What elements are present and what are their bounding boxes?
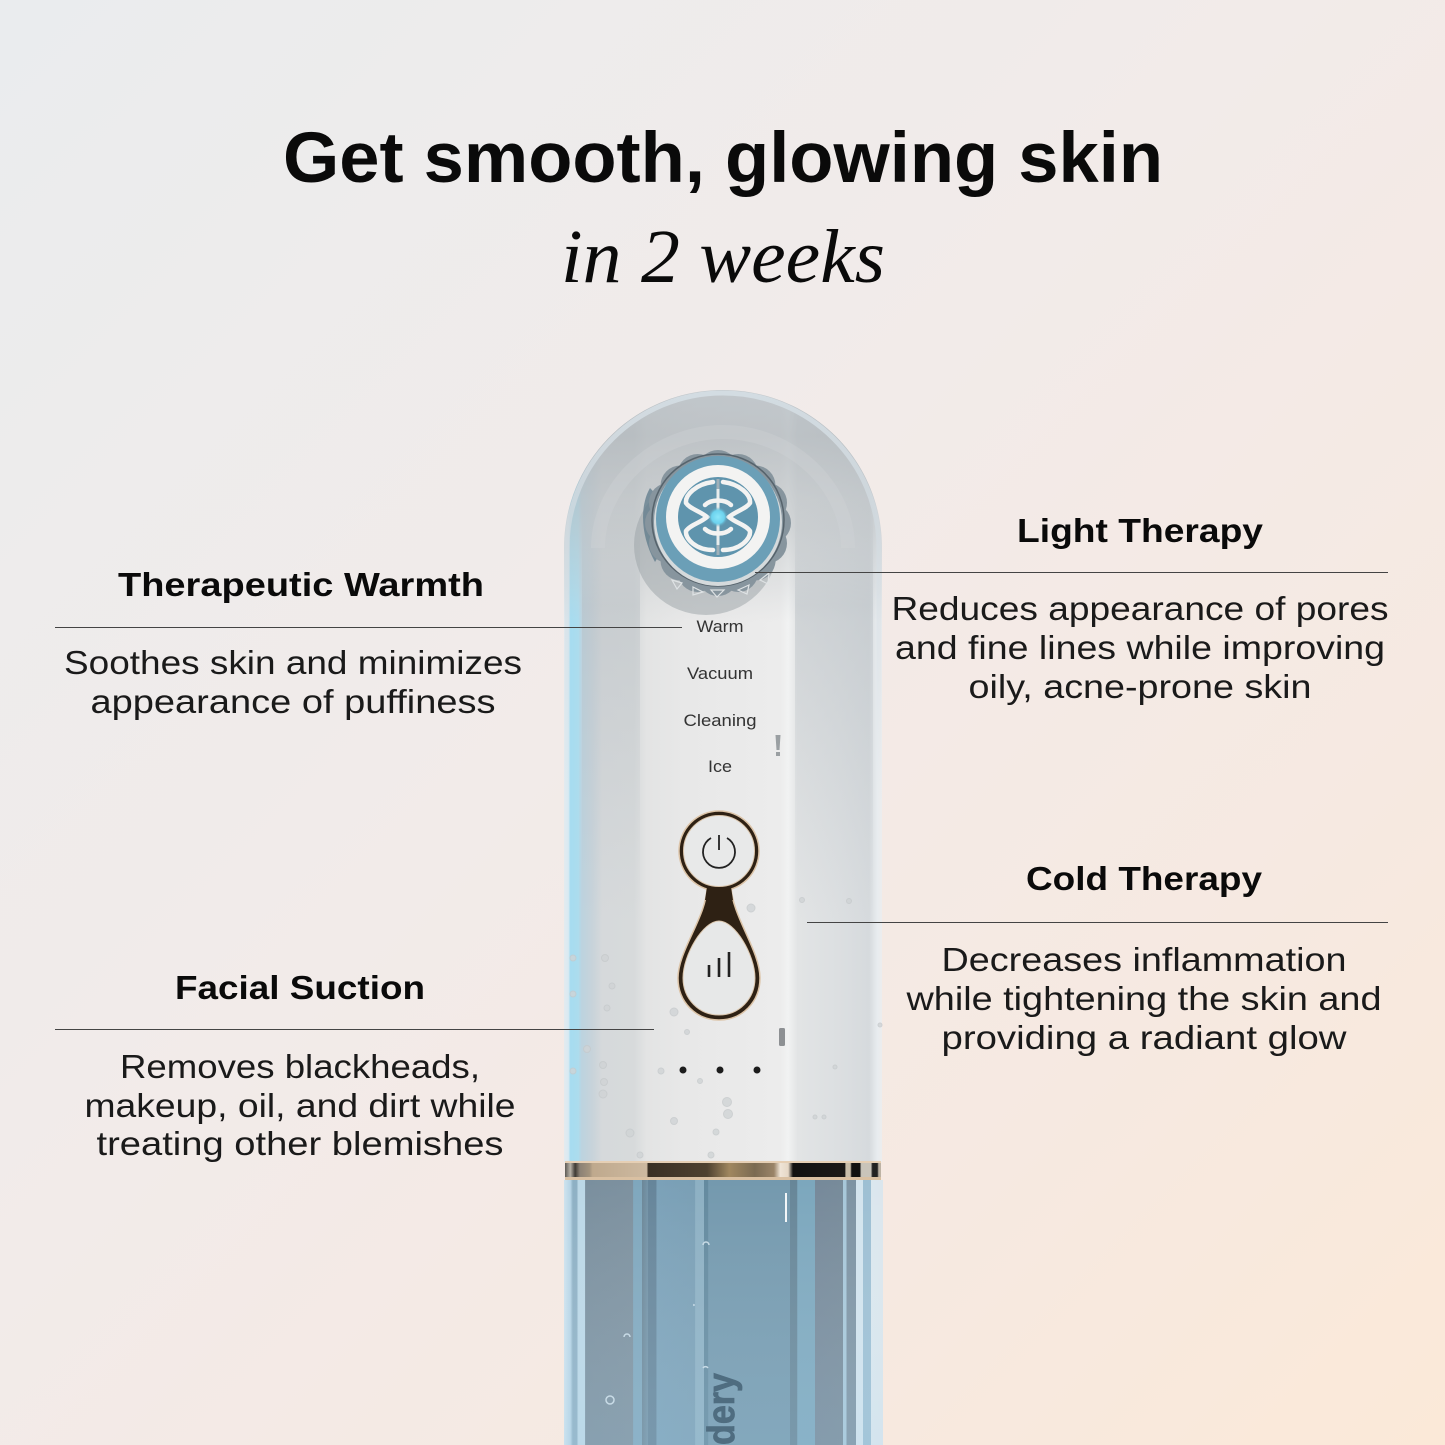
gold ring	[565, 1161, 881, 1180]
callout: cold therapy: providing a radiant glow	[942, 1019, 1347, 1056]
intensity button	[683, 921, 755, 1015]
callout: facial suction: Facial Suction	[175, 970, 425, 1007]
icon: warning mark	[776, 735, 780, 756]
device mode labels: Ice	[708, 757, 732, 776]
dial gear	[645, 450, 791, 596]
water droplets	[570, 898, 882, 1158]
callout: light therapy: Light Therapy	[1017, 513, 1263, 550]
title	[283, 119, 1163, 299]
device upper body	[564, 390, 882, 1162]
callout: therapeutic warmth: appearance of puffiness	[90, 683, 496, 720]
device mode labels: Vacuum	[687, 664, 753, 683]
callout: therapeutic warmth: Soothes skin and minimizes	[64, 644, 522, 681]
button frame	[678, 811, 760, 1020]
dial shadow	[634, 475, 778, 615]
callout: light therapy: and fine lines while improving	[895, 629, 1385, 666]
callout: cold therapy: Cold Therapy	[1026, 861, 1262, 898]
battery indicator	[779, 1028, 785, 1046]
device lower body	[564, 1180, 883, 1445]
callout: facial suction: treating other blemishes	[96, 1125, 504, 1162]
callout: facial suction: Removes blackheads,	[120, 1048, 480, 1085]
indicator dots	[680, 1066, 760, 1074]
device: facial tool	[564, 390, 883, 1445]
callout: therapeutic warmth	[55, 567, 682, 720]
power button	[684, 816, 754, 886]
bubbles	[606, 1242, 709, 1404]
callout: cold therapy: Decreases inflammation	[942, 941, 1346, 978]
dial circuit pattern	[686, 479, 750, 555]
callout: light therapy: Reduces appearance of pores	[892, 590, 1388, 627]
title: in 2 weeks	[561, 215, 885, 299]
dial	[634, 450, 791, 615]
callout: light therapy	[755, 513, 1388, 705]
callout: light therapy: oily, acne-prone skin	[968, 668, 1312, 705]
device mode labels: Warm	[696, 617, 744, 636]
callout: facial suction: makeup, oil, and dirt while	[84, 1087, 516, 1124]
callout: facial suction	[55, 970, 654, 1162]
callout: cold therapy: while tightening the skin and	[905, 980, 1382, 1017]
callout: cold therapy	[807, 861, 1388, 1056]
callout: therapeutic warmth: Therapeutic Warmth	[118, 567, 484, 604]
device mode labels	[684, 617, 756, 776]
device mode labels: Cleaning	[684, 711, 756, 730]
brand wordmark: dery	[701, 1373, 743, 1445]
title: Get smooth, glowing skin	[283, 119, 1163, 198]
